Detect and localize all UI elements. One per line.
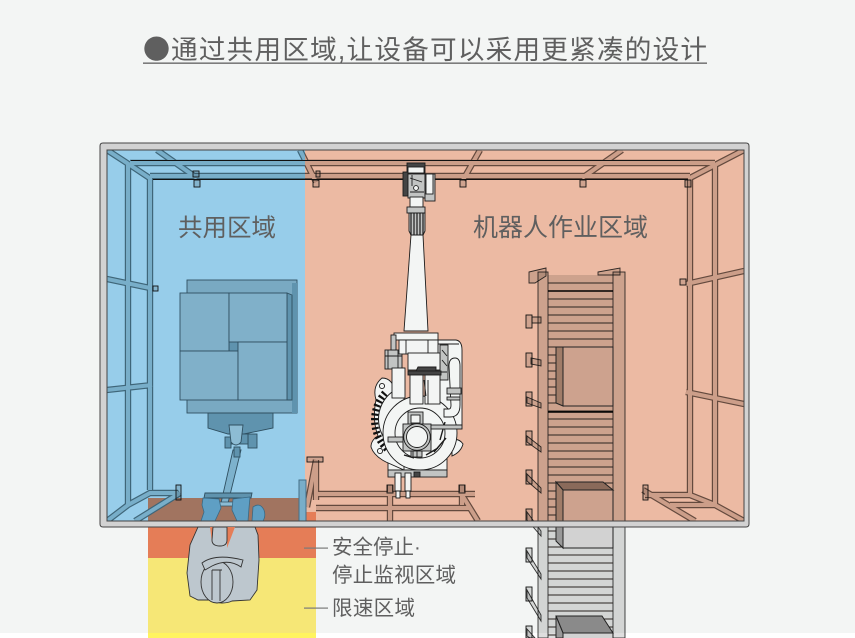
robot wrist <box>403 163 435 213</box>
robot gear disc <box>371 378 463 470</box>
callout: speed limit: 限速区域 <box>332 597 415 620</box>
parts stack <box>180 280 297 413</box>
box top right <box>229 293 287 342</box>
gripper tool <box>204 413 273 506</box>
robot base plate <box>388 470 447 498</box>
robot forearm <box>404 235 428 331</box>
conveyor brackets <box>526 268 620 638</box>
safety fence <box>107 150 744 521</box>
fence post at zone boundary <box>299 480 306 521</box>
orange sliver inside frame <box>306 512 316 521</box>
robot upper body <box>385 333 462 425</box>
title: 通过共用区域,让设备可以采用更紧凑的设计 <box>171 35 707 65</box>
robot base body <box>388 450 447 470</box>
conveyor <box>526 268 625 638</box>
safety stop zone <box>148 527 316 558</box>
person head <box>201 561 233 603</box>
conveyor rails <box>538 272 548 638</box>
callout: safety stop: 安全停止· <box>332 536 421 559</box>
person body <box>187 527 259 603</box>
label: shared zone: 共用区域 <box>178 214 276 242</box>
box 2 <box>556 482 613 548</box>
box bottom left <box>180 351 238 400</box>
robot cable pipe <box>444 358 460 417</box>
title: ● <box>143 28 170 67</box>
safety stop zone overlap <box>148 498 305 521</box>
robot cable fins <box>409 213 425 235</box>
panel: shared zone <box>107 150 305 521</box>
speed limit zone <box>148 558 316 633</box>
callout: safety stop: 停止监视区域 <box>332 564 456 587</box>
label: robot work zone: 机器人作业区域 <box>473 214 648 242</box>
speed limit zone edge <box>148 633 316 638</box>
person hands <box>201 497 265 521</box>
conveyor rollers <box>548 275 613 638</box>
robot ring <box>383 396 457 470</box>
box 3 <box>556 616 613 638</box>
panel: robot work zone <box>305 150 744 521</box>
box 1 <box>556 347 613 406</box>
robot joint <box>388 412 462 457</box>
robot arm <box>371 163 463 498</box>
box top left <box>180 293 229 351</box>
frame border <box>100 143 749 527</box>
robot motors <box>408 353 441 404</box>
box bottom right <box>238 342 287 400</box>
person <box>187 527 259 603</box>
callout: safety stop <box>304 536 456 587</box>
